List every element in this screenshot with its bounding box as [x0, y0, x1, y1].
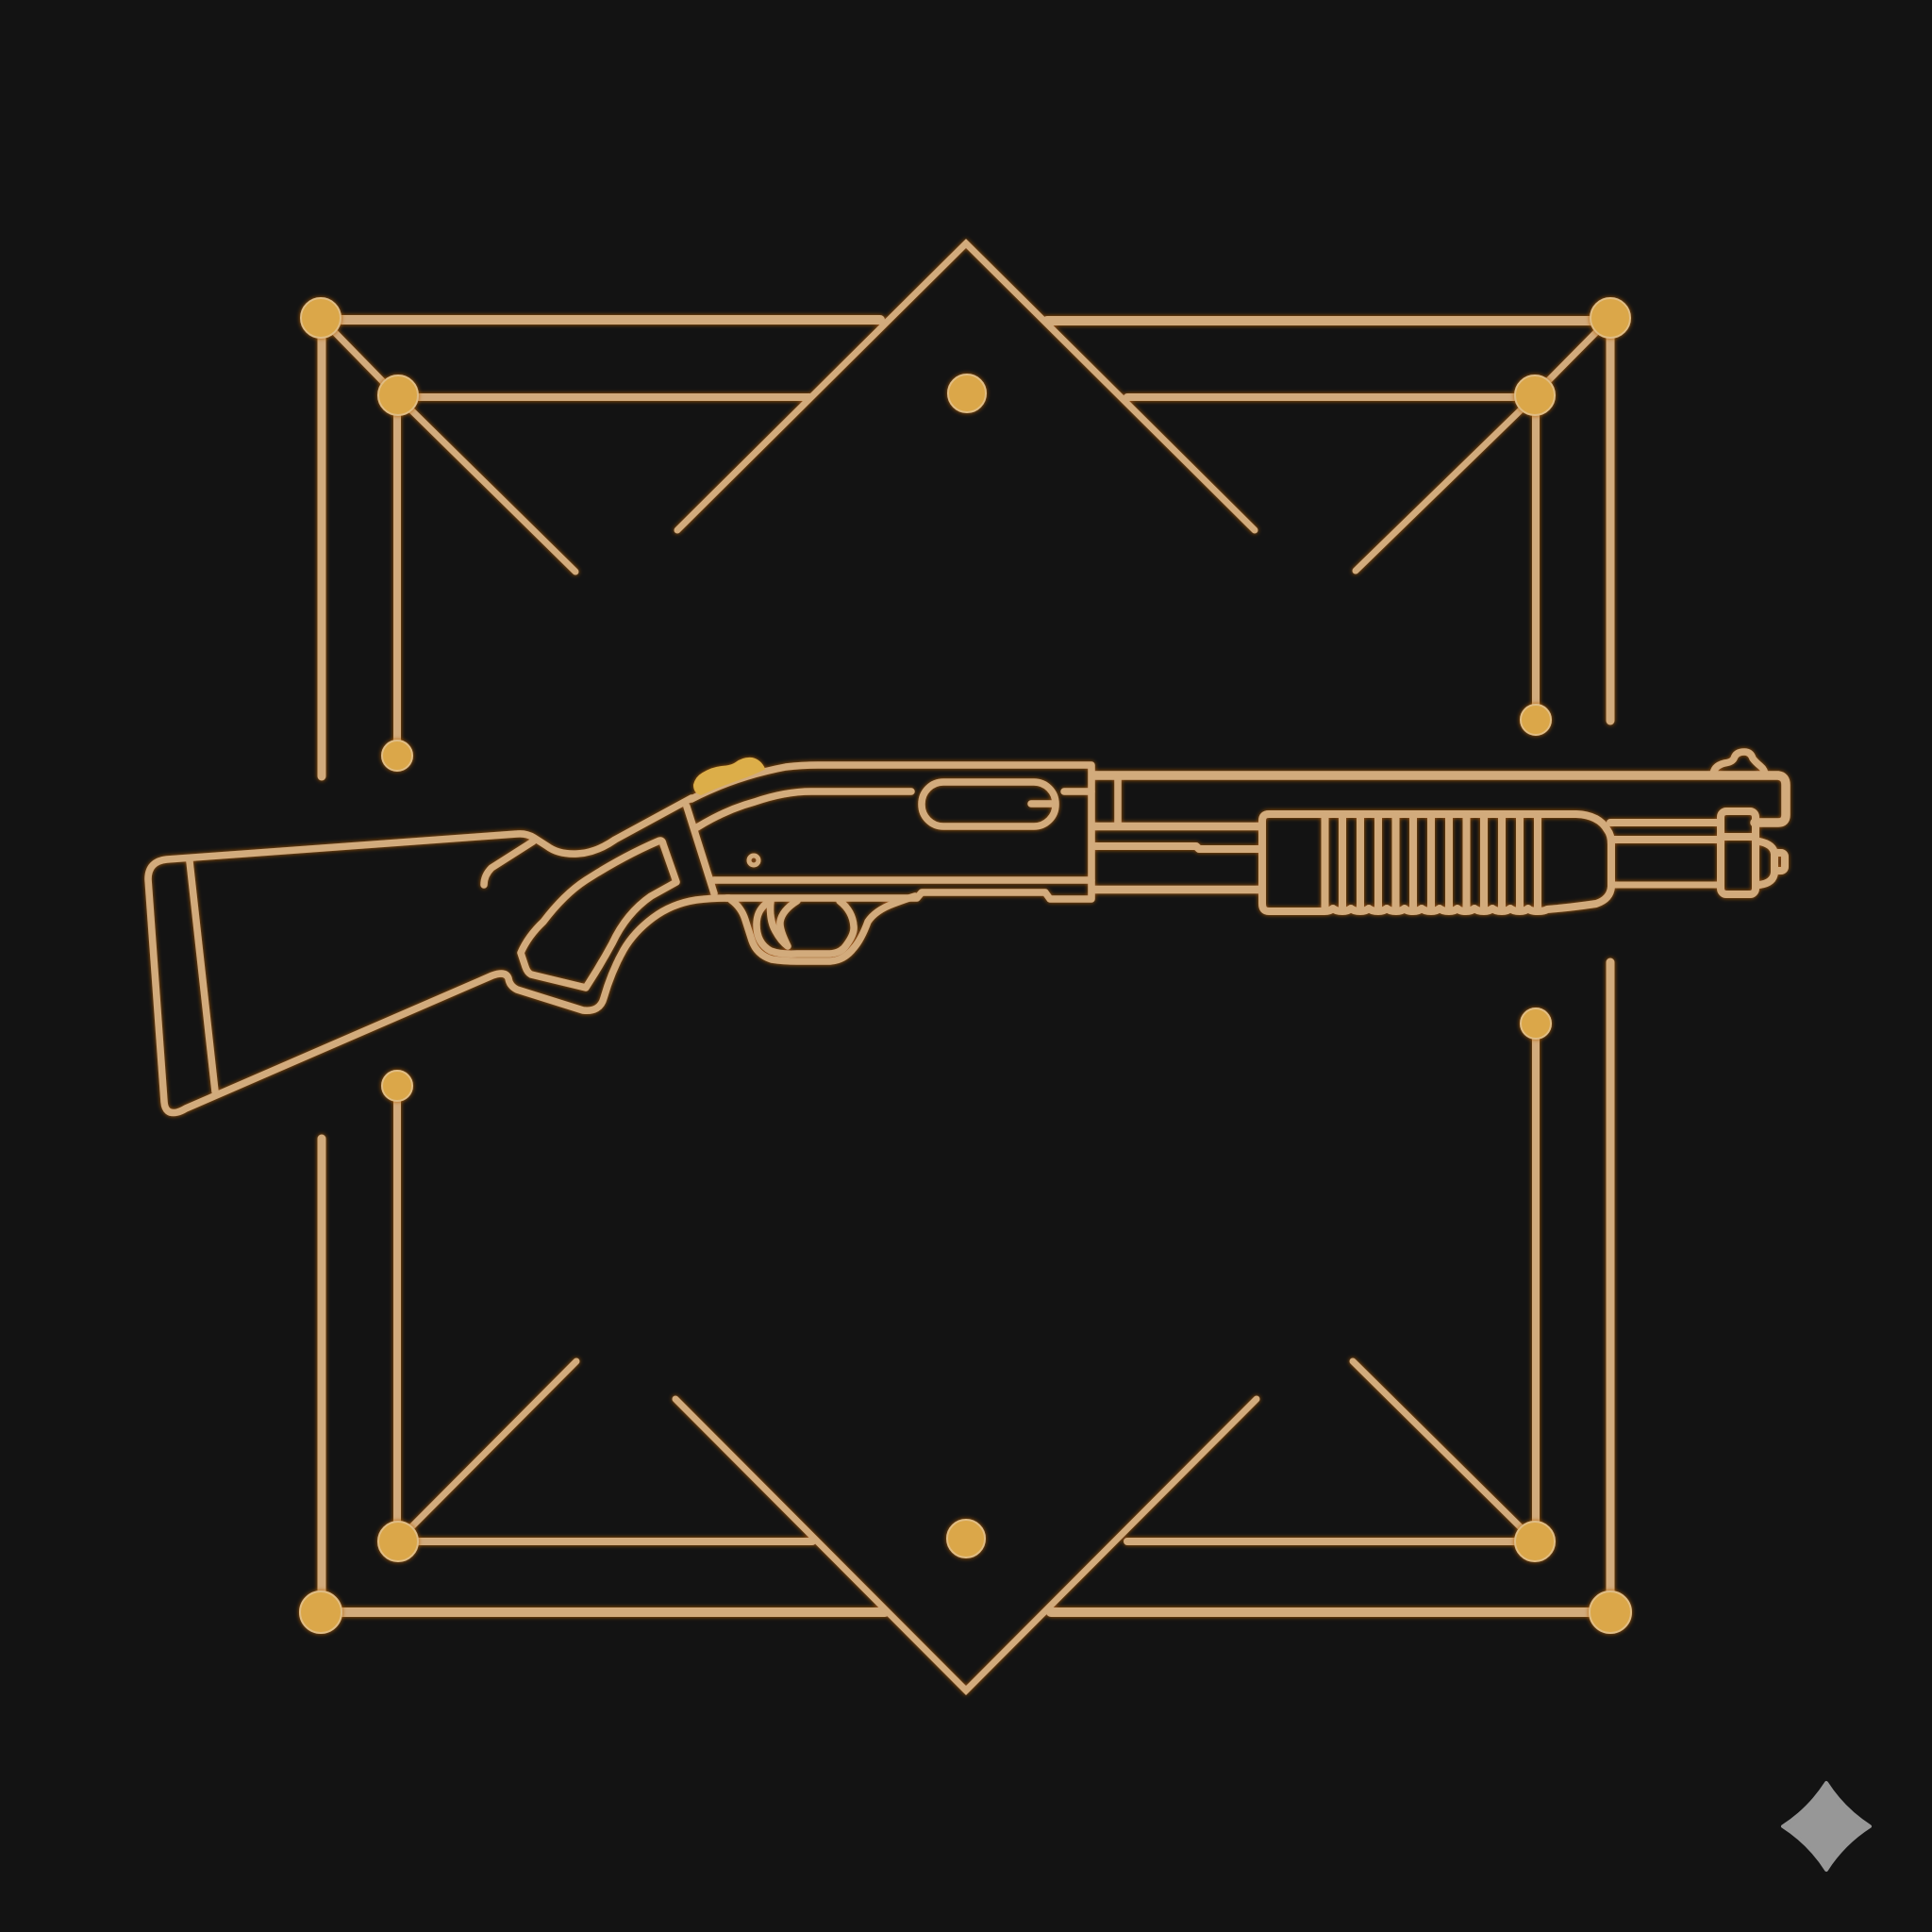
top right lines — [1047, 318, 1610, 721]
bottom diamond chevron — [675, 1399, 1257, 1690]
gold node dots — [300, 298, 1631, 1633]
bottom right lines — [1051, 962, 1610, 1612]
forend ribs — [1324, 816, 1538, 908]
muzzle tube and cap — [1612, 811, 1785, 894]
sparkle watermark — [1783, 1783, 1870, 1870]
gold detail — [694, 758, 764, 794]
shotgun — [148, 752, 1786, 1113]
trigger guard — [731, 896, 915, 961]
butt pad line — [190, 861, 215, 1091]
pin — [749, 856, 758, 865]
stock — [148, 798, 729, 1113]
barrel — [1095, 752, 1786, 890]
comb line — [484, 841, 533, 885]
bottom left lines — [321, 1086, 885, 1612]
front sight — [1713, 752, 1765, 775]
receiver — [687, 758, 1091, 899]
bottom frame — [321, 962, 1610, 1690]
top diamond chevron — [677, 243, 1255, 530]
trigger — [771, 901, 797, 946]
grip panel — [521, 841, 676, 988]
ejection port — [922, 782, 1056, 826]
top left lines — [321, 318, 880, 776]
top frame — [321, 243, 1610, 776]
pump forend — [1262, 814, 1611, 911]
